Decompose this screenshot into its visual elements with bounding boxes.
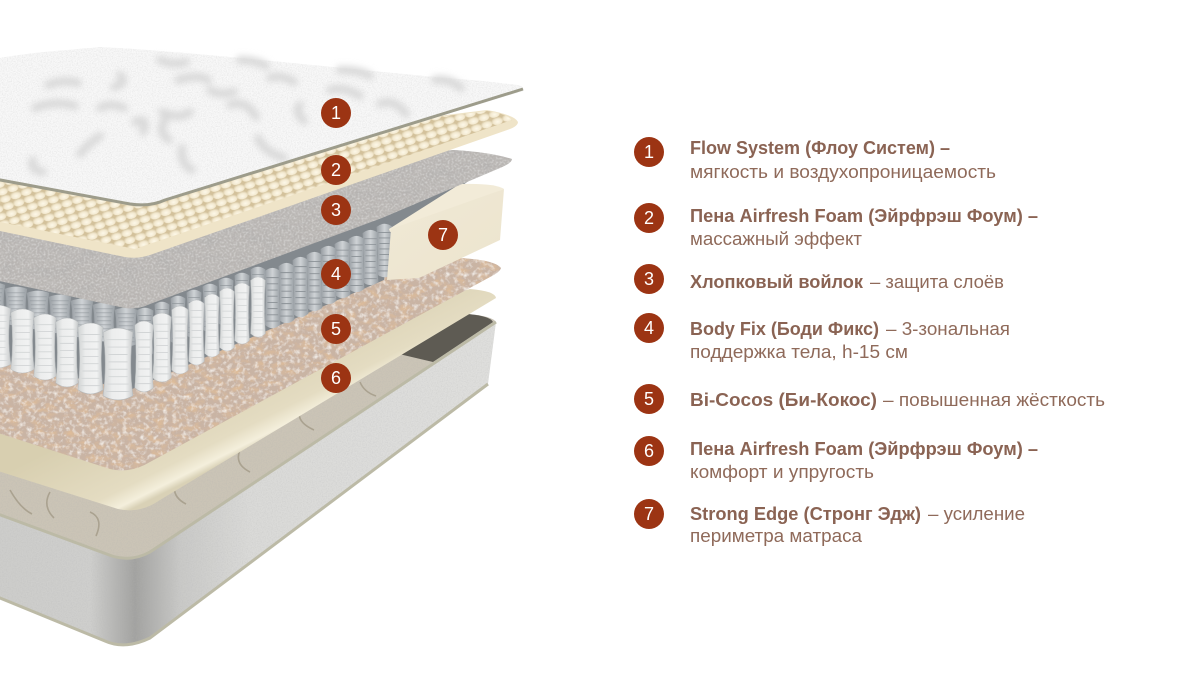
layer 3: cotton felt: [0, 150, 512, 308]
legend item 3: [634, 264, 1004, 294]
legend item 4: – 3-зональная: [886, 319, 1010, 339]
legend item 6: [634, 436, 1038, 482]
legend item 7: периметра матраса: [690, 526, 863, 546]
legend item 2: [634, 203, 1038, 249]
legend item 6: Пена Airfresh Foam (Эйрфрэш Фоум) –: [690, 439, 1038, 459]
layer: mattress base: [0, 314, 496, 645]
legend item 2: 2: [644, 208, 654, 228]
legend item 7: 7: [644, 504, 654, 524]
diagram markers: 7: [438, 225, 448, 245]
legend item 1: 1: [644, 142, 654, 162]
legend item 3: Хлопковый войлок: [690, 272, 864, 292]
layer 1: flow system quilted top: [0, 47, 523, 205]
legend item 7: – усиление: [928, 504, 1025, 524]
legend: [634, 137, 1105, 546]
layer 7: strong edge foam: [387, 184, 504, 280]
legend item 4: 4: [644, 318, 654, 338]
legend item 1: Flow System (Флоу Систем) –: [690, 138, 950, 158]
legend item 2: массажный эффект: [690, 229, 862, 249]
panel: mattress cross-section: [0, 47, 523, 645]
legend item 5: [634, 384, 1105, 414]
legend item 5: Bi-Cocos (Би-Кокос): [690, 390, 877, 410]
legend item 2: Пена Airfresh Foam (Эйрфрэш Фоум) –: [690, 206, 1038, 226]
piping: [0, 89, 523, 205]
layer 5: coir: [0, 258, 501, 470]
diagram markers: 3: [331, 200, 341, 220]
legend item 6: 6: [644, 441, 654, 461]
legend item 3: 3: [644, 269, 654, 289]
legend item 4: Body Fix (Боди Фикс): [690, 319, 879, 339]
legend item 5: – повышенная жёсткость: [883, 390, 1105, 410]
diagram markers: 4: [331, 264, 341, 284]
legend item 5: 5: [644, 389, 654, 409]
legend item 4: [634, 313, 1010, 362]
legend item 3: – защита слоёв: [870, 272, 1004, 292]
legend item 7: [634, 499, 1025, 546]
diagram markers: 1: [331, 103, 341, 123]
diagram markers: 2: [331, 160, 341, 180]
diagram markers: 5: [331, 319, 341, 339]
legend item 7: Strong Edge (Стронг Эдж): [690, 504, 921, 524]
legend item 4: поддержка тела, h-15 см: [690, 342, 908, 362]
quilting shadows: [32, 60, 461, 172]
legend item 1: мягкость и воздухопроницаемость: [690, 162, 996, 182]
layer 6: foam: [0, 289, 496, 510]
legend item 1: [634, 137, 996, 182]
layer 4: pocket springs: [0, 180, 470, 400]
legend item 6: комфорт и упругость: [690, 462, 874, 482]
layer 2: airfresh foam: [0, 110, 518, 258]
diagram markers: 6: [331, 368, 341, 388]
diagram markers: [321, 98, 458, 393]
